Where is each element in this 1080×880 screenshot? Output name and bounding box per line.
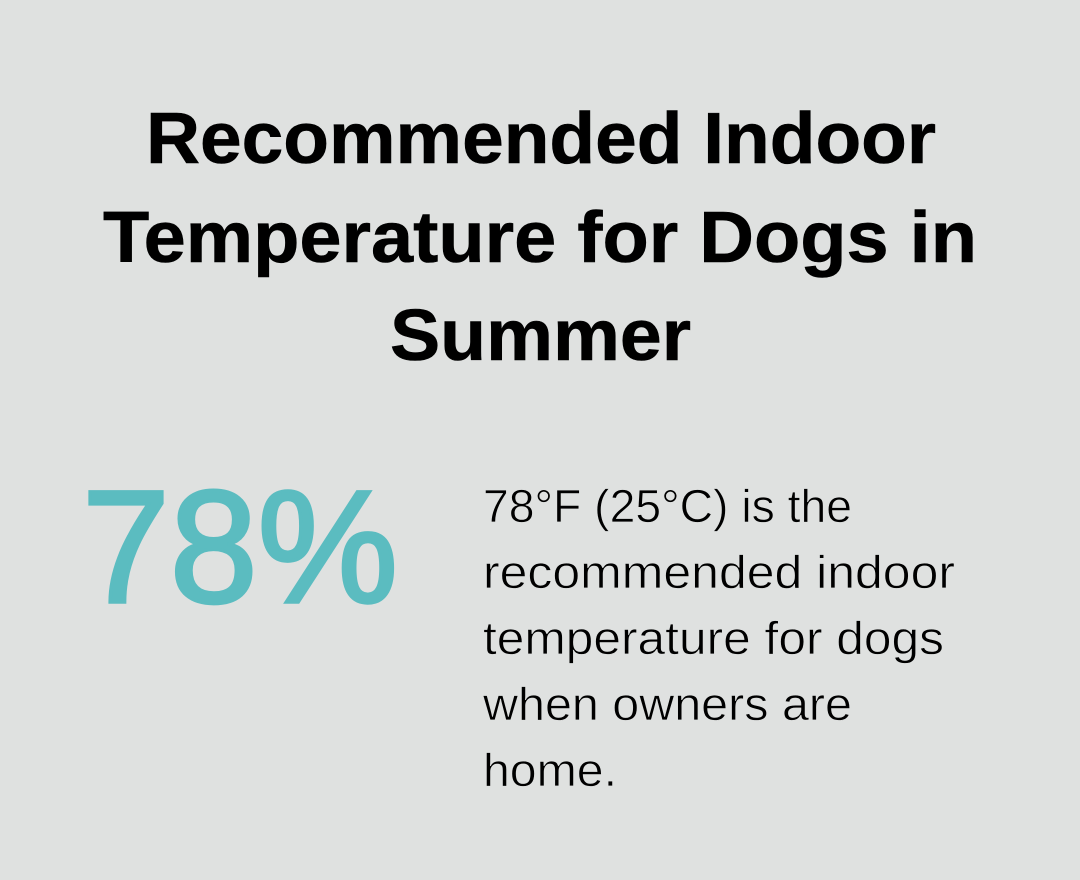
description text — [482, 480, 955, 796]
description text: home. — [483, 744, 617, 796]
big statistic: 78%: 78% — [82, 457, 398, 636]
description text: recommended indoor — [483, 546, 955, 598]
description text: when owners are — [482, 678, 852, 730]
title: Recommended Indoor — [146, 99, 936, 179]
title: Temperature for Dogs in — [103, 198, 977, 278]
description text: 78°F (25°C) is the — [483, 480, 852, 532]
title: Summer — [390, 296, 691, 376]
description text: temperature for dogs — [483, 612, 944, 664]
title — [103, 99, 977, 376]
